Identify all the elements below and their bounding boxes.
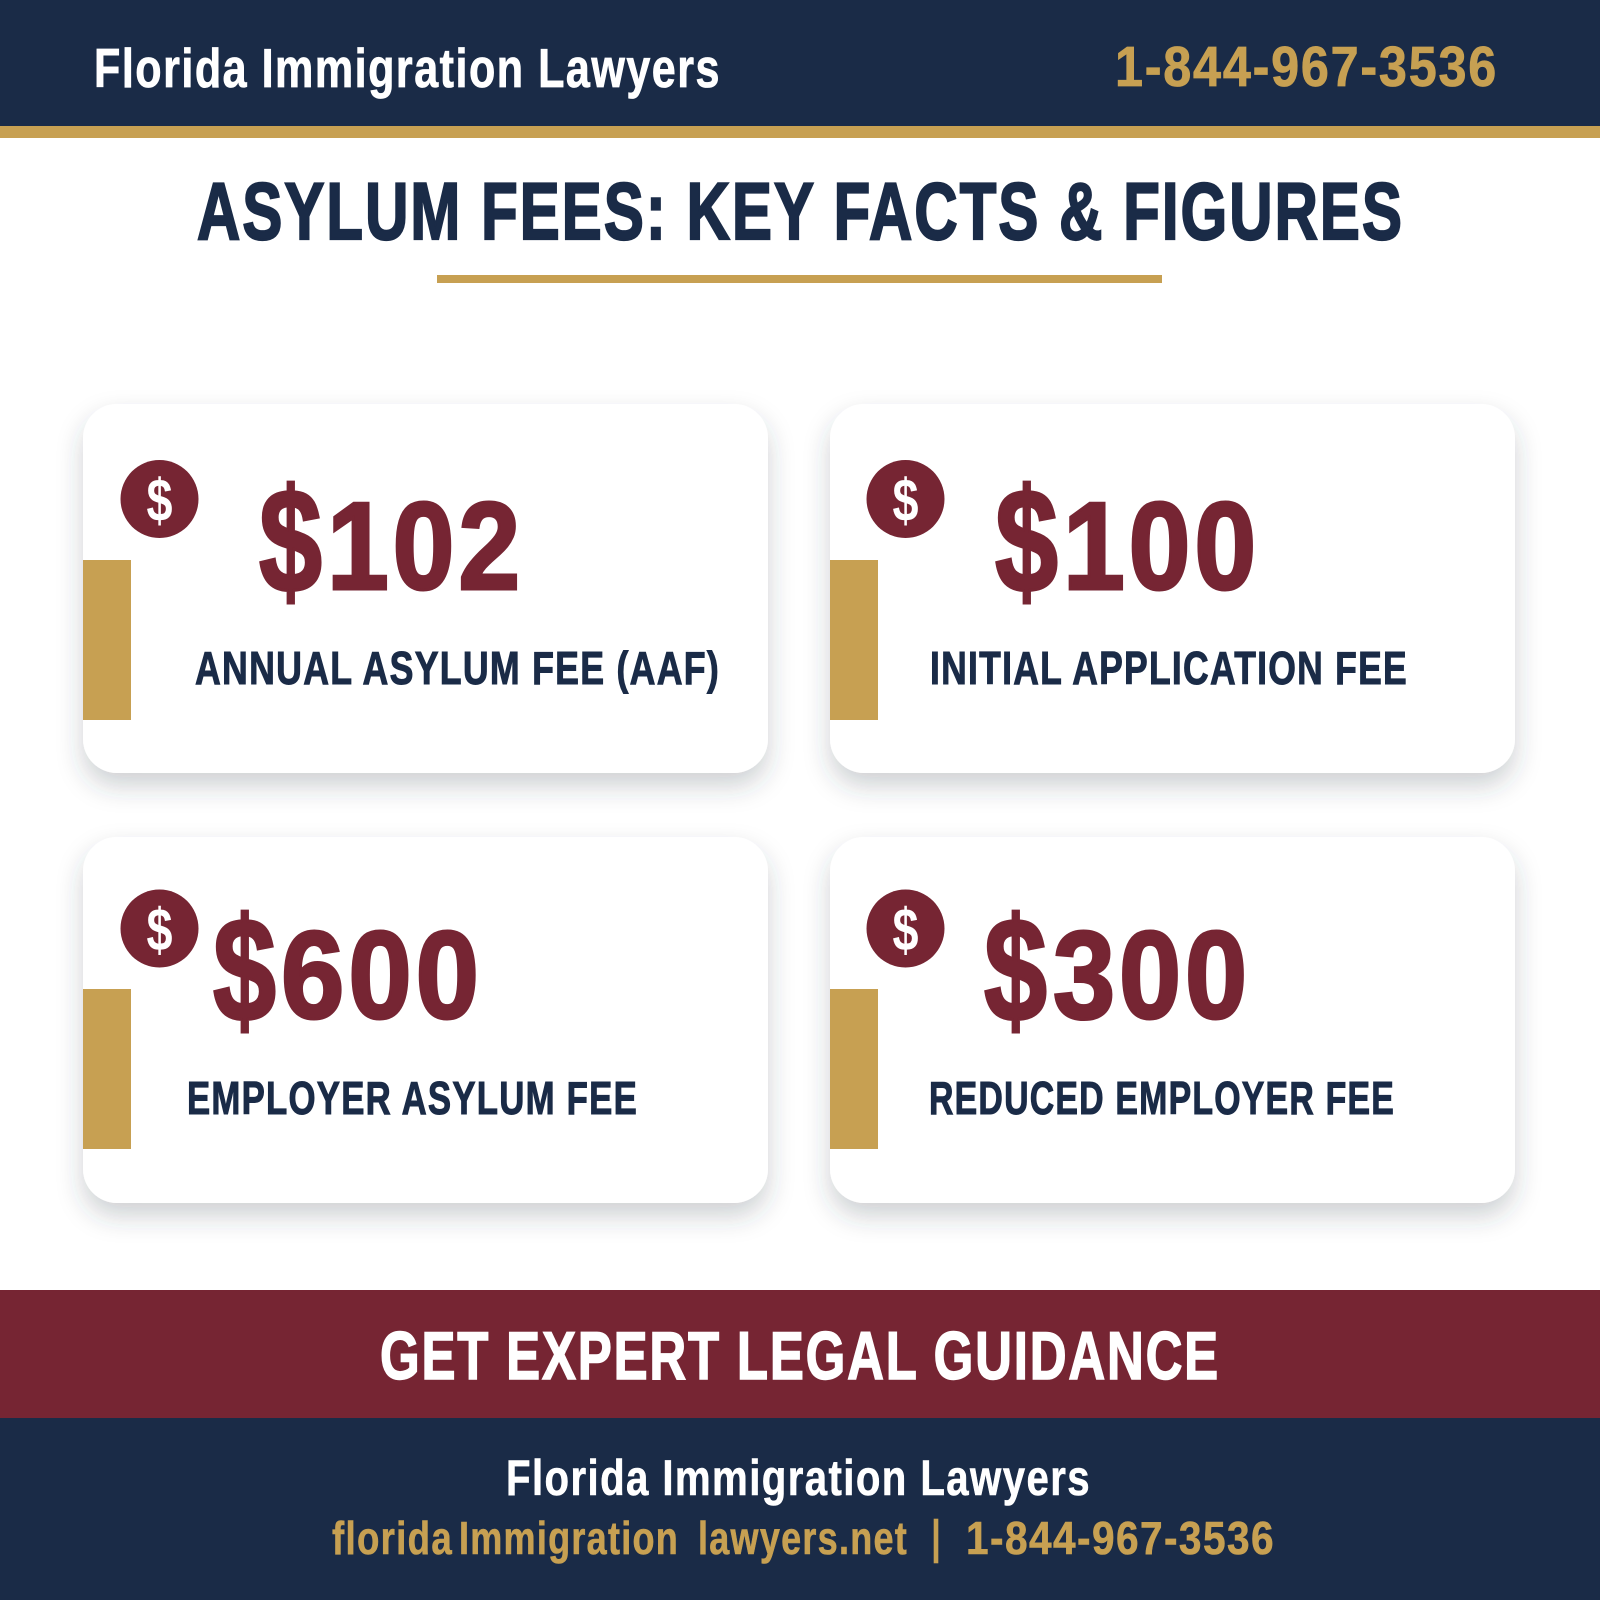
label: INITIAL APPLICATION FEE xyxy=(930,642,1408,694)
footer contact line: florida xyxy=(332,1512,453,1564)
card: annual asylum fee xyxy=(83,404,768,773)
footer contact line xyxy=(332,1512,1275,1564)
icon: dollar xyxy=(120,890,198,968)
value: $ xyxy=(995,459,1058,624)
card: reduced employer fee xyxy=(830,837,1515,1203)
call to action band xyxy=(0,1290,1600,1418)
top header bar xyxy=(0,0,1600,138)
title underline xyxy=(437,275,1162,283)
footer contact line: 1-844-967-3536 xyxy=(966,1512,1275,1564)
footer xyxy=(0,1418,1600,1600)
value: $ xyxy=(213,888,276,1053)
icon: dollar xyxy=(866,890,944,968)
value xyxy=(259,459,524,624)
icon: dollar: $ xyxy=(892,467,918,534)
icon: dollar xyxy=(866,460,944,538)
firm name: Florida Immigration Lawyers xyxy=(94,37,721,99)
value: 300 xyxy=(1053,907,1251,1045)
value xyxy=(213,888,483,1053)
label: REDUCED EMPLOYER FEE xyxy=(929,1072,1395,1124)
phone number: 1-844-967-3536 xyxy=(1115,35,1498,99)
value xyxy=(984,888,1251,1053)
icon: dollar: $ xyxy=(892,896,918,964)
card: initial application fee xyxy=(830,404,1515,773)
value: $ xyxy=(984,888,1047,1053)
call to action band: GET EXPERT LEGAL GUIDANCE xyxy=(380,1318,1220,1394)
icon: dollar: $ xyxy=(146,896,172,964)
value: 102 xyxy=(327,478,524,616)
card: employer asylum fee xyxy=(83,837,768,1203)
value: 100 xyxy=(1063,478,1260,616)
footer contact line: lawyers.net xyxy=(698,1512,908,1564)
icon: dollar: $ xyxy=(146,467,172,534)
label: ANNUAL ASYLUM FEE (AAF) xyxy=(195,642,720,694)
value: 600 xyxy=(281,907,483,1045)
footer firm name: Florida Immigration Lawyers xyxy=(506,1450,1091,1506)
label: EMPLOYER ASYLUM FEE xyxy=(187,1072,638,1124)
value: $ xyxy=(259,459,322,624)
title xyxy=(197,167,1404,283)
value xyxy=(995,459,1260,624)
icon: dollar xyxy=(120,460,198,538)
footer contact line: Immigration xyxy=(459,1512,679,1564)
